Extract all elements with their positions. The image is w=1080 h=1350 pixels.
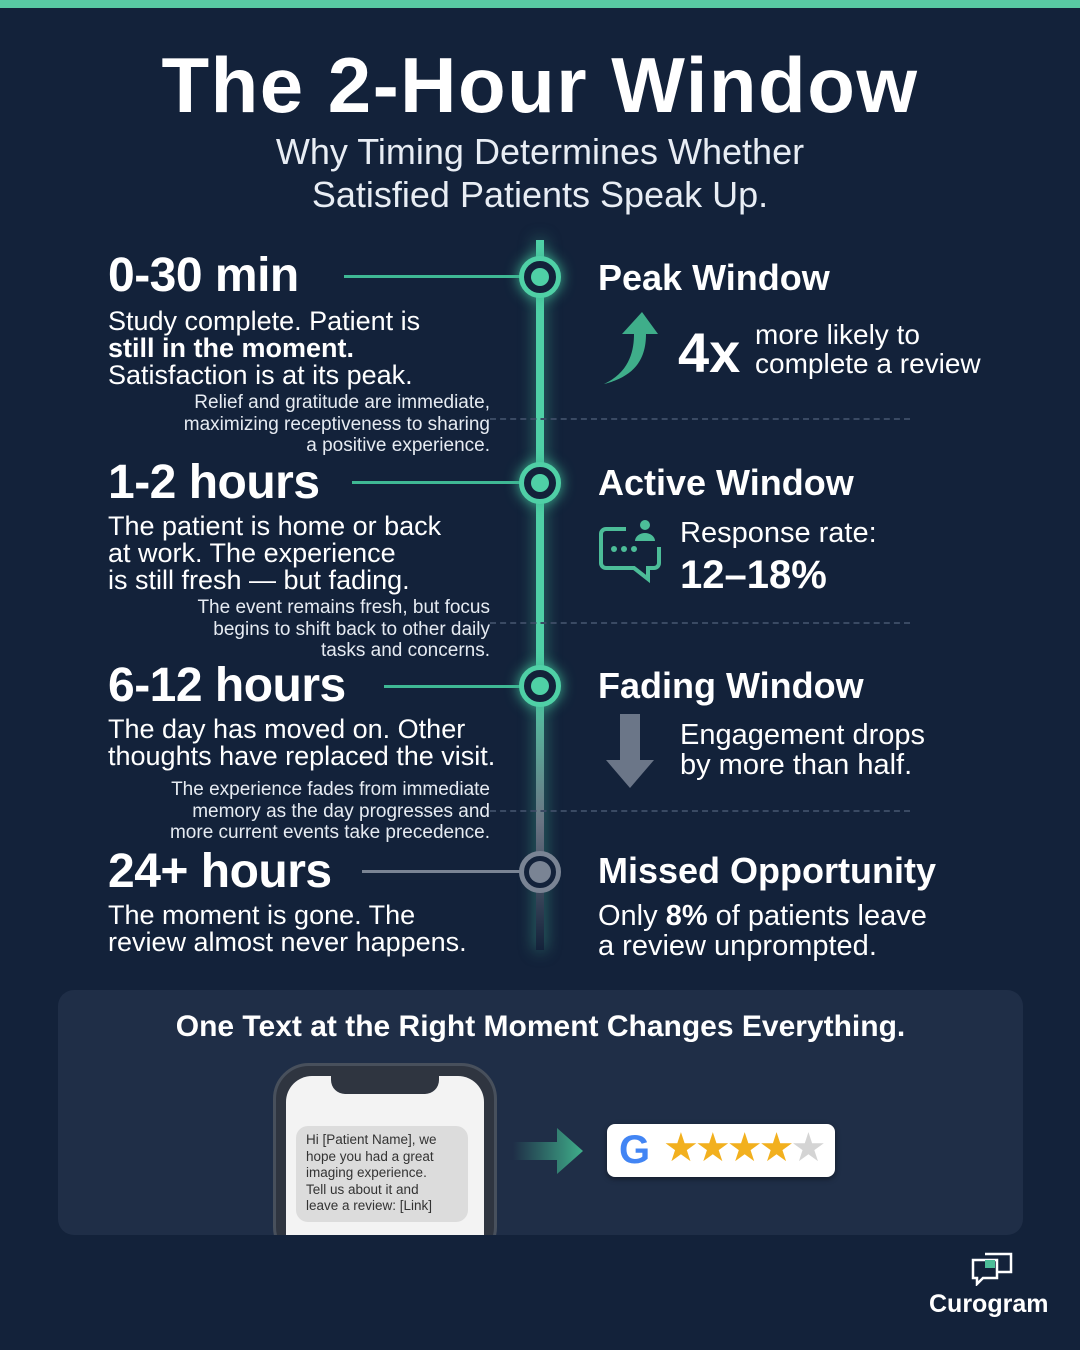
stage 4: 24+ hours: The moment is gone. The [108, 900, 415, 930]
logo: Curogram [929, 1290, 1048, 1318]
message bubble: hope you had a great [306, 1148, 434, 1164]
stage 1: 0-30 min: maximizing receptiveness to sharing [184, 414, 490, 434]
phone [273, 1063, 497, 1263]
node 4 [519, 851, 561, 893]
icon: down arrow [606, 714, 654, 788]
logo [929, 1252, 1048, 1318]
right: active window: 12–18% [680, 553, 827, 597]
arrow [518, 1128, 583, 1174]
google rating card: G [619, 1128, 650, 1172]
stage 2: 1-2 hours: is still fresh — but fading. [108, 565, 410, 595]
right: active window: Response rate: [680, 517, 877, 549]
stage 2: 1-2 hours: at work. The experience [108, 538, 396, 568]
right: fading window: by more than half. [680, 749, 912, 781]
stage 3: 6-12 hours: memory as the day progresses and [192, 800, 490, 822]
message bubble: Hi [Patient Name], we [306, 1132, 437, 1147]
message bubble: Tell us about it and [306, 1182, 419, 1196]
stage 1: 0-30 min: a positive experience. [306, 435, 490, 456]
right: missed opportunity: Missed Opportunity [598, 850, 936, 891]
right: missed opportunity: a review unprompted. [598, 930, 877, 962]
right: missed opportunity: Only 8% of patients leave [598, 900, 927, 932]
stage 3: 6-12 hours: more current events take precedence. [170, 822, 490, 843]
stage 2: 1-2 hours: begins to shift back to other daily [213, 618, 490, 640]
message bubble: leave a review: [Link] [306, 1198, 432, 1213]
subtitle [276, 131, 804, 215]
node 3 [519, 665, 561, 707]
bottom panel [58, 990, 1023, 1235]
right: fading window [598, 665, 925, 788]
right: peak window: 4x [678, 321, 740, 384]
stage 1: 0-30 min: Satisfaction is at its peak. [108, 360, 413, 390]
right: peak window: more likely to [755, 319, 920, 350]
google rating card: ★★★★★ [663, 1126, 822, 1170]
right: active window [598, 462, 877, 597]
stage 4: 24+ hours [108, 845, 467, 957]
subtitle: Why Timing Determines Whether [276, 131, 804, 172]
right: peak window: complete a review [755, 348, 981, 379]
timeline line [536, 240, 544, 950]
title: The 2-Hour Window [161, 41, 919, 129]
google rating card [607, 1124, 835, 1177]
subtitle: Satisfied Patients Speak Up. [312, 174, 768, 215]
message bubble: imaging experience. [306, 1165, 427, 1180]
stage 3: 6-12 hours: The day has moved on. Other [108, 714, 465, 744]
stage 3: 6-12 hours: 6-12 hours [108, 659, 346, 712]
stage 1: 0-30 min [108, 249, 490, 456]
stage 4: 24+ hours: 24+ hours [108, 845, 332, 898]
right: active window: Active Window [598, 462, 854, 503]
right: peak window: Peak Window [598, 257, 830, 298]
right: fading window: Fading Window [598, 665, 864, 706]
stage 1: 0-30 min: Study complete. Patient is [108, 306, 420, 336]
right: fading window: Engagement drops [680, 719, 925, 751]
stage 1: 0-30 min: still in the moment. [108, 333, 354, 363]
stage 1: 0-30 min: Relief and gratitude are immediate, [194, 392, 490, 413]
stage 2: 1-2 hours: 1-2 hours [108, 456, 320, 509]
message bubble [296, 1126, 468, 1222]
icon: up arrow [604, 312, 658, 384]
node 1 [519, 256, 561, 298]
node 2 [519, 462, 561, 504]
stage 2: 1-2 hours: The event remains fresh, but focus [197, 597, 490, 618]
icon: chat [599, 520, 661, 583]
stage 2: 1-2 hours: tasks and concerns. [321, 640, 490, 661]
stage 4: 24+ hours: review almost never happens. [108, 927, 467, 957]
stage 3: 6-12 hours: The experience fades from immediate [171, 779, 490, 800]
dividers [490, 418, 910, 420]
stage 1: 0-30 min: 0-30 min [108, 249, 299, 302]
stage 3: 6-12 hours: thoughts have replaced the visit. [108, 741, 495, 771]
right: missed opportunity [598, 850, 936, 962]
stage 3: 6-12 hours [108, 659, 495, 843]
right: peak window [598, 257, 981, 384]
stage 2: 1-2 hours [108, 456, 490, 661]
panel title: One Text at the Right Moment Changes Everything. [176, 1010, 905, 1043]
stage 2: 1-2 hours: The patient is home or back [108, 511, 441, 541]
